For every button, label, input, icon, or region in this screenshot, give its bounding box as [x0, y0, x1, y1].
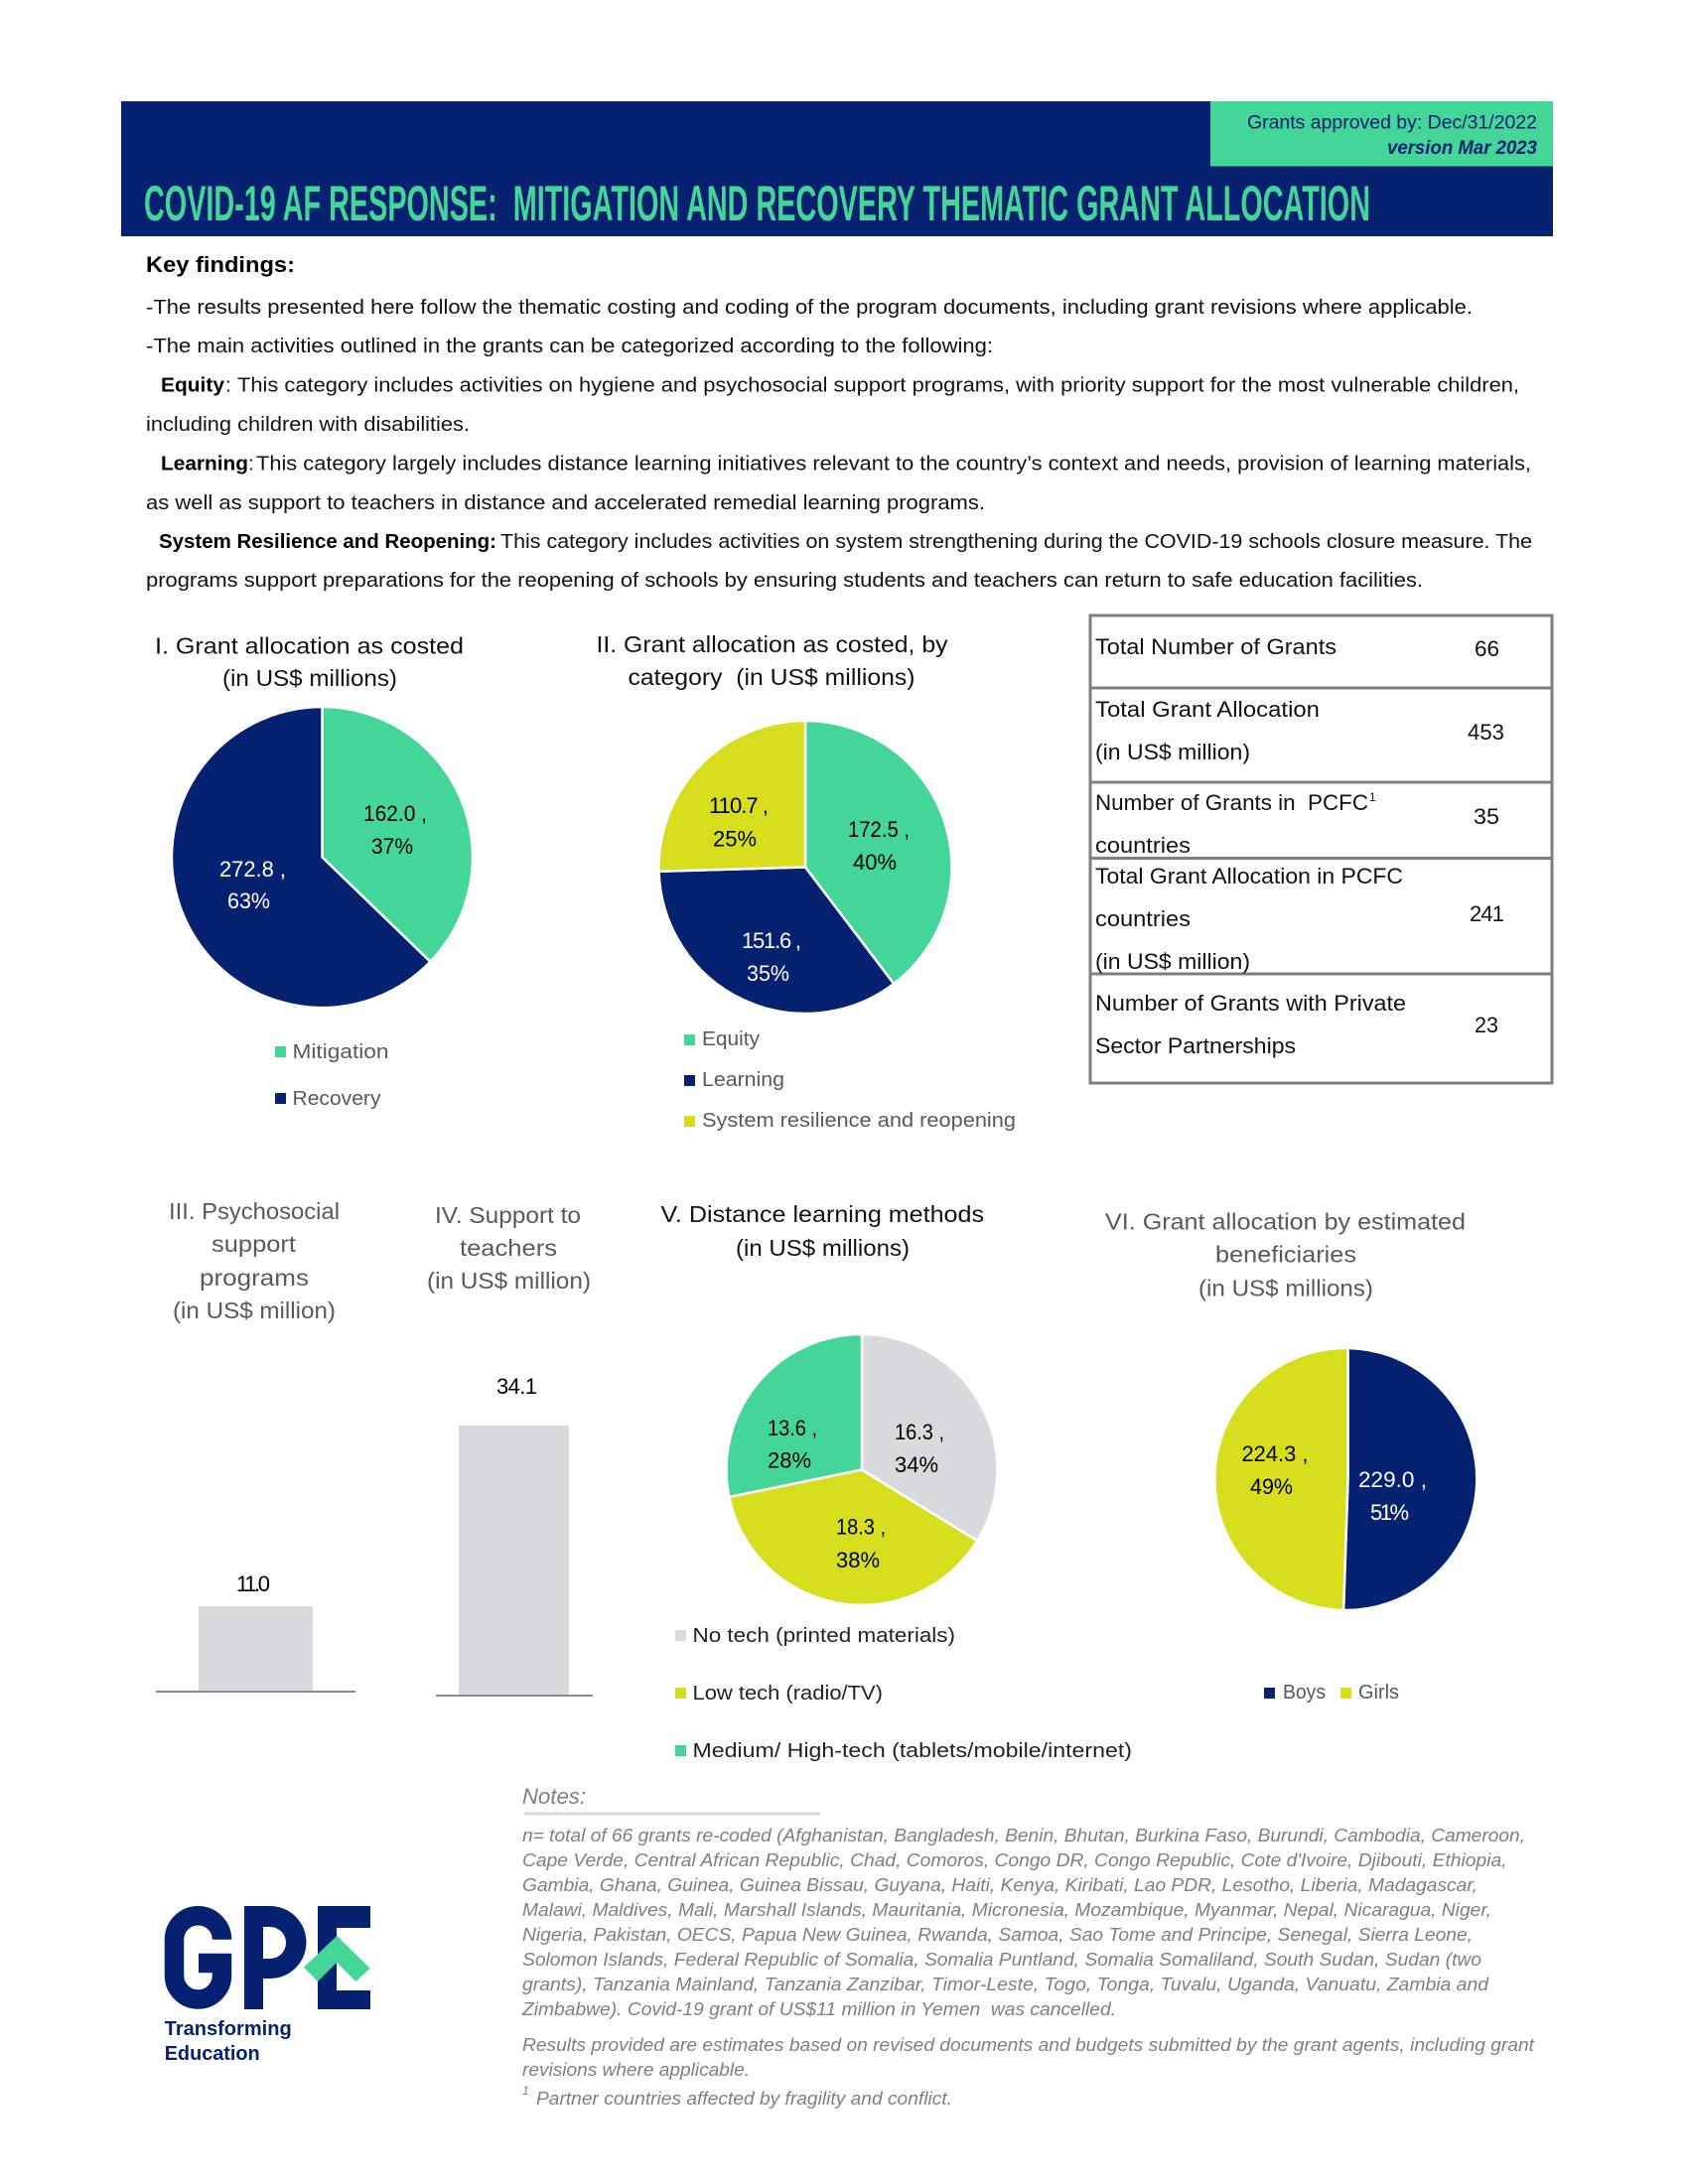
panel: chart IV support to teachers: [427, 1202, 593, 1697]
pie V data labels: 28%: [768, 1447, 811, 1473]
row: number of grants in PCFC countries: countries: [1095, 833, 1191, 858]
key findings text block: This category includes activities on hygiene and psychosocial support programs, with priority support for the most vulnerable children,: [237, 373, 1519, 397]
country list note: Cape Verde, Central African Republic, Chad, Comoros, Congo DR, Congo Republic, Cote d'Ivoire, Djibouti, Ethiopia,: [522, 1849, 1507, 1870]
row: total grant allocation in PCFC countries: [1095, 864, 1504, 974]
panel: chart VI grant allocation by estimated beneficiaries: [1105, 1209, 1477, 1704]
key findings text block: [146, 252, 1532, 592]
estimates note: [522, 2034, 1535, 2080]
pie chart VI: [1214, 1348, 1477, 1610]
legend V: Medium/ High-tech (tablets/mobile/internet): [693, 1740, 1132, 1762]
chart I heading: [155, 633, 464, 691]
bar: 11.0: 11.0: [236, 1571, 270, 1596]
date badge: [1210, 101, 1553, 167]
pie V data labels: [768, 1416, 944, 1572]
key findings text block: -The results presented here follow the thematic costing and coding of the program documents, including grant revisions where applicable.: [146, 296, 1473, 319]
pie V data labels: 38%: [836, 1548, 880, 1572]
logo chevron: [304, 1936, 370, 1981]
pie V data labels: 34%: [895, 1452, 938, 1477]
row: total number of grants: Total Number of Grants: [1095, 634, 1336, 659]
key findings text block: including children with disabilities.: [146, 413, 470, 436]
legend VI: [1264, 1682, 1399, 1704]
pie V data labels: 16.3 ,: [895, 1420, 944, 1444]
row: private sector partnerships: Number of Grants with Private: [1095, 991, 1406, 1016]
estimates note: revisions where applicable.: [522, 2059, 750, 2080]
panel: chart II grant allocation by category: [596, 631, 1016, 1132]
row: private sector partnerships: [1095, 991, 1498, 1058]
row: total grant allocation in PCFC countries: (in US$ million): [1095, 949, 1250, 974]
date badge: version Mar 2023: [1387, 138, 1537, 159]
chart I heading: I. Grant allocation as costed: [155, 633, 464, 659]
key findings text block: This category includes activities on system strengthening during the COVID-19 schools closure measure. The: [500, 530, 1532, 553]
pie V data labels: 13.6 ,: [768, 1416, 817, 1440]
logo letter G: [175, 1916, 222, 1999]
legend VI: Girls: [1358, 1682, 1399, 1704]
row: private sector partnerships: Sector Partnerships: [1095, 1033, 1296, 1058]
row: total grant allocation: [1095, 697, 1504, 764]
country list note: [521, 1825, 1525, 2019]
row: total grant allocation in PCFC countries: 241: [1470, 901, 1504, 926]
pie I data labels: 37%: [371, 834, 413, 859]
GPE logo: [165, 1906, 370, 2065]
pie I data labels: 162.0 ,: [363, 801, 427, 826]
row: total number of grants: [1095, 634, 1499, 661]
chart IV heading: IV. Support to: [435, 1202, 581, 1228]
key findings text block: This category largely includes distance learning initiatives relevant to the country’s context and needs, provision of learning materials,: [256, 453, 1531, 475]
chart II heading: category (in US$ millions): [628, 664, 915, 690]
chart VI heading: [1105, 1209, 1466, 1300]
pie VI data labels: 224.3 ,: [1241, 1441, 1309, 1466]
logo tagline: Education: [165, 2043, 260, 2065]
chart III heading: support: [211, 1231, 297, 1257]
row: number of grants in PCFC countries: 35: [1474, 804, 1499, 829]
chart IV heading: teachers: [460, 1235, 557, 1261]
notes block: [521, 1784, 1535, 2109]
header banner: [121, 101, 1553, 236]
chart II heading: II. Grant allocation as costed, by: [596, 631, 948, 657]
legend II: [684, 1028, 1016, 1132]
chart III heading: (in US$ million): [173, 1297, 336, 1323]
pie II data labels: 172.5 ,: [848, 817, 910, 842]
legend VI: Boys: [1283, 1682, 1326, 1704]
pie I data labels: 63%: [227, 888, 270, 913]
legend II: System resilience and reopening: [702, 1110, 1016, 1132]
key findings text block: System Resilience and Reopening:: [159, 530, 496, 553]
panel: chart V distance learning methods: [661, 1201, 1132, 1762]
chart III heading: III. Psychosocial: [169, 1198, 340, 1224]
row: total number of grants: 66: [1475, 636, 1499, 661]
pie chart II: [659, 721, 952, 1014]
bar: 34.1: 34.1: [496, 1374, 537, 1399]
footnote: Partner countries affected by fragility and conflict.: [536, 2088, 952, 2109]
row: number of grants in PCFC countries: 1: [1369, 790, 1376, 804]
pie I data labels: [219, 801, 427, 913]
logo tagline: [165, 2018, 292, 2065]
panel: chart I grant allocation as costed: [155, 633, 473, 1110]
bar: 11.0: [156, 1571, 355, 1693]
row: total grant allocation: Total Grant Allocation: [1095, 697, 1320, 722]
chart III heading: programs: [200, 1265, 309, 1291]
key findings text block: :: [248, 453, 254, 475]
notes heading: [522, 1784, 820, 1815]
pie I data labels: 272.8 ,: [219, 857, 286, 882]
row: private sector partnerships: 23: [1475, 1013, 1498, 1037]
pie II data labels: 151.6 ,: [742, 928, 801, 953]
pie chart V: [727, 1334, 997, 1605]
pie II data labels: 110.7 ,: [709, 793, 769, 818]
chart II heading: [596, 631, 948, 690]
country list note: n= total of 66 grants re-coded (Afghanistan, Bangladesh, Benin, Bhutan, Burkina Faso, Burundi, Cambodia, Cameroon,: [522, 1825, 1525, 1845]
key findings text block: -The main activities outlined in the grants can be categorized according to the following:: [146, 335, 993, 357]
estimates note: Results provided are estimates based on revised documents and budgets submitted by the grant agents, including grant: [522, 2034, 1535, 2055]
pie II data labels: [709, 793, 910, 986]
chart VI heading: beneficiaries: [1215, 1241, 1356, 1267]
chart V heading: [661, 1201, 984, 1261]
row: total grant allocation in PCFC countries: countries: [1095, 906, 1191, 931]
row: total grant allocation in PCFC countries: Total Grant Allocation in PCFC: [1095, 864, 1403, 888]
key findings text block: Learning: [161, 453, 248, 475]
row: total grant allocation: (in US$ million): [1095, 740, 1250, 764]
chart VI heading: VI. Grant allocation by estimated: [1105, 1209, 1466, 1235]
pie VI data labels: [1241, 1441, 1427, 1525]
row: number of grants in PCFC countries: [1095, 790, 1499, 858]
pie VI data labels: 51%: [1370, 1500, 1409, 1525]
logo letter E: [318, 1906, 370, 2009]
legend II: Equity: [702, 1028, 760, 1050]
chart III heading: [169, 1198, 340, 1323]
row: number of grants in PCFC countries: Number of Grants in PCFC: [1095, 790, 1368, 815]
legend V: No tech (printed materials): [693, 1625, 955, 1647]
chart IV heading: (in US$ million): [427, 1268, 591, 1294]
pie VI data labels: 49%: [1250, 1474, 1293, 1499]
footnote: 1: [522, 2084, 529, 2098]
pie II data labels: 40%: [853, 850, 897, 875]
pie chart I: [172, 707, 473, 1008]
country list note: Nigeria, Pakistan, OECS, Papua New Guinea, Rwanda, Samoa, Sao Tome and Principe, Senegal, Sierra Leone,: [522, 1924, 1473, 1945]
country list note: Solomon Islands, Federal Republic of Somalia, Somalia Puntland, Somalia Somaliland, South Sudan, Sudan (two: [522, 1949, 1481, 1970]
key findings text block: :: [225, 373, 231, 397]
chart V heading: V. Distance learning methods: [661, 1201, 984, 1227]
row: total grant allocation: 453: [1468, 720, 1504, 745]
country list note: Zimbabwe). Covid-19 grant of US$11 million in Yemen was cancelled.: [521, 1998, 1116, 2019]
legend V: [675, 1625, 1132, 1762]
key findings text block: Key findings:: [146, 252, 295, 277]
pie II data labels: 35%: [747, 961, 789, 986]
chart V heading: (in US$ millions): [736, 1235, 910, 1261]
bar: 34.1: [436, 1374, 593, 1697]
key findings text block: programs support preparations for the reopening of schools by ensuring students and teachers can return to safe education facilities.: [146, 569, 1423, 592]
key findings text block: Equity: [161, 373, 225, 397]
key findings text block: as well as support to teachers in distance and accelerated remedial learning programs.: [146, 491, 985, 514]
legend V: Low tech (radio/TV): [693, 1683, 883, 1705]
notes heading: Notes:: [522, 1784, 586, 1809]
panel: chart III psychosocial support programs: [156, 1198, 355, 1693]
logo letter P: [244, 1906, 306, 2009]
summary table: [1090, 615, 1552, 1083]
legend I: [275, 1041, 389, 1110]
pie II data labels: 25%: [713, 826, 757, 852]
pie V data labels: 18.3 ,: [836, 1515, 886, 1539]
date badge: Grants approved by: Dec/31/2022: [1247, 113, 1537, 133]
legend I: Mitigation: [292, 1041, 389, 1063]
country list note: Gambia, Ghana, Guinea, Guinea Bissau, Guyana, Haiti, Kenya, Kiribati, Lao PDR, Lesotho, Liberia, Madagascar,: [522, 1874, 1477, 1895]
chart VI heading: (in US$ millions): [1198, 1275, 1373, 1300]
chart IV heading: [427, 1202, 591, 1294]
legend I: Recovery: [292, 1088, 381, 1110]
country list note: grants), Tanzania Mainland, Tanzania Zanzibar, Timor-Leste, Togo, Tonga, Tuvalu, Uganda, Vanuatu, Zambia and: [522, 1974, 1489, 1994]
legend II: Learning: [702, 1069, 784, 1091]
pie VI data labels: 229.0 ,: [1358, 1467, 1427, 1492]
chart I heading: (in US$ millions): [222, 665, 397, 691]
country list note: Malawi, Maldives, Mali, Marshall Islands, Mauritania, Micronesia, Mozambique, Myanmar, Nepal, Nicaragua, Niger,: [522, 1899, 1491, 1920]
logo tagline: Transforming: [165, 2018, 292, 2040]
